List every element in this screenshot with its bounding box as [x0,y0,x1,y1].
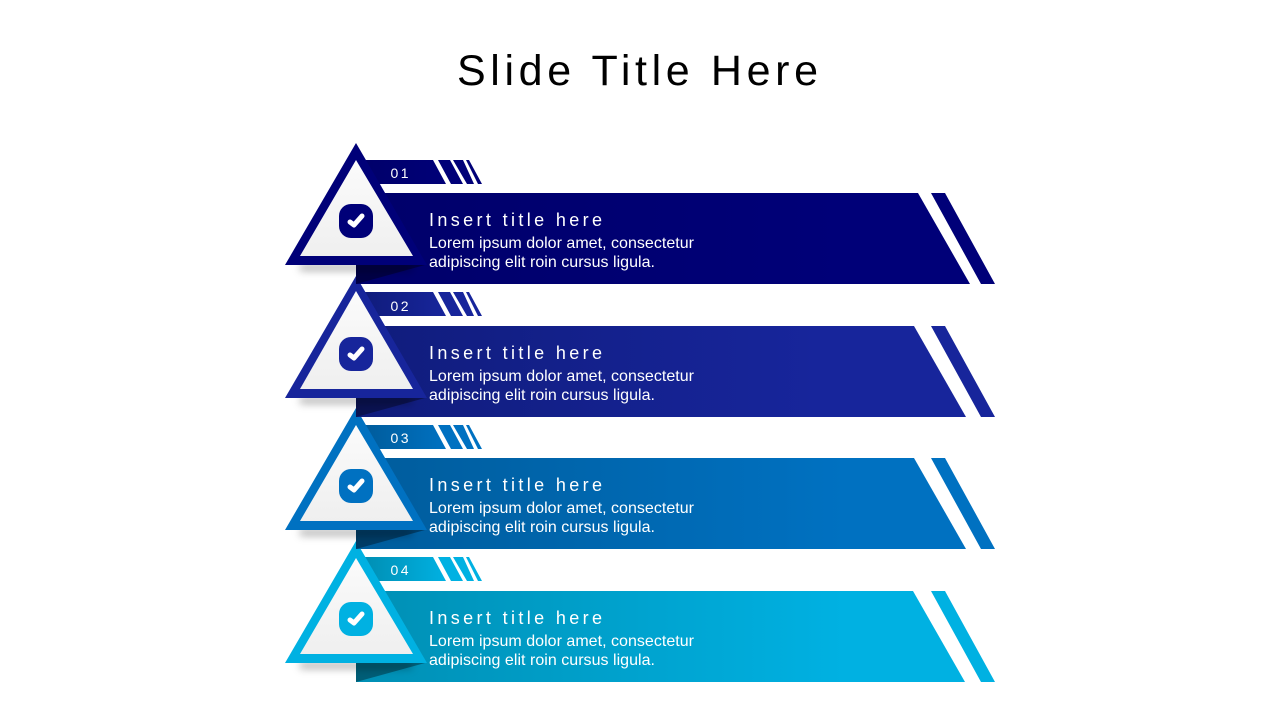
tab: number 02: 02 [390,298,409,314]
panel: step 01 [285,143,995,284]
tab: number 02 [360,292,482,316]
tab: number 03 [360,425,482,449]
text: step 03 [429,475,695,536]
banner: step 03 [356,458,995,549]
triangle badge with check icon [285,408,427,536]
text: step 03: adipiscing elit roin cursus ligula. [429,519,655,536]
panel: step 02 [285,276,995,417]
text: step 04: adipiscing elit roin cursus ligula. [429,652,655,669]
text: step 01: Insert title here [429,210,602,230]
banner: step 02 [356,326,995,417]
tab: number 03: 03 [390,430,409,446]
text: step 04 [429,608,695,669]
tab: number 01: 01 [390,165,409,181]
banner: step 04 [356,591,995,682]
text: step 01: adipiscing elit roin cursus ligula. [429,254,655,271]
tab: number 04 [360,557,482,581]
triangle badge with check icon [285,276,427,404]
text: step 04: Lorem ipsum dolor amet, consectetur [429,633,695,650]
tab: number 01 [360,160,482,184]
banner: step 01 [356,193,995,284]
tab: number 04: 04 [390,562,409,578]
text: step 02: Lorem ipsum dolor amet, consectetur [429,368,695,385]
text: step 03: Insert title here [429,475,602,495]
text: step 03: Lorem ipsum dolor amet, consectetur [429,500,695,517]
triangle badge with check icon [285,541,427,669]
text: step 02: Insert title here [429,343,602,363]
text: step 02 [429,343,695,404]
text: step 02: adipiscing elit roin cursus ligula. [429,387,655,404]
panel: step 03 [285,408,995,549]
triangle badge with check icon [285,143,427,271]
text: step 01: Lorem ipsum dolor amet, consectetur [429,235,695,252]
text: step 04: Insert title here [429,608,602,628]
title: Slide Title Here [457,47,818,95]
panel: step 04 [285,541,995,682]
text: step 01 [429,210,695,271]
